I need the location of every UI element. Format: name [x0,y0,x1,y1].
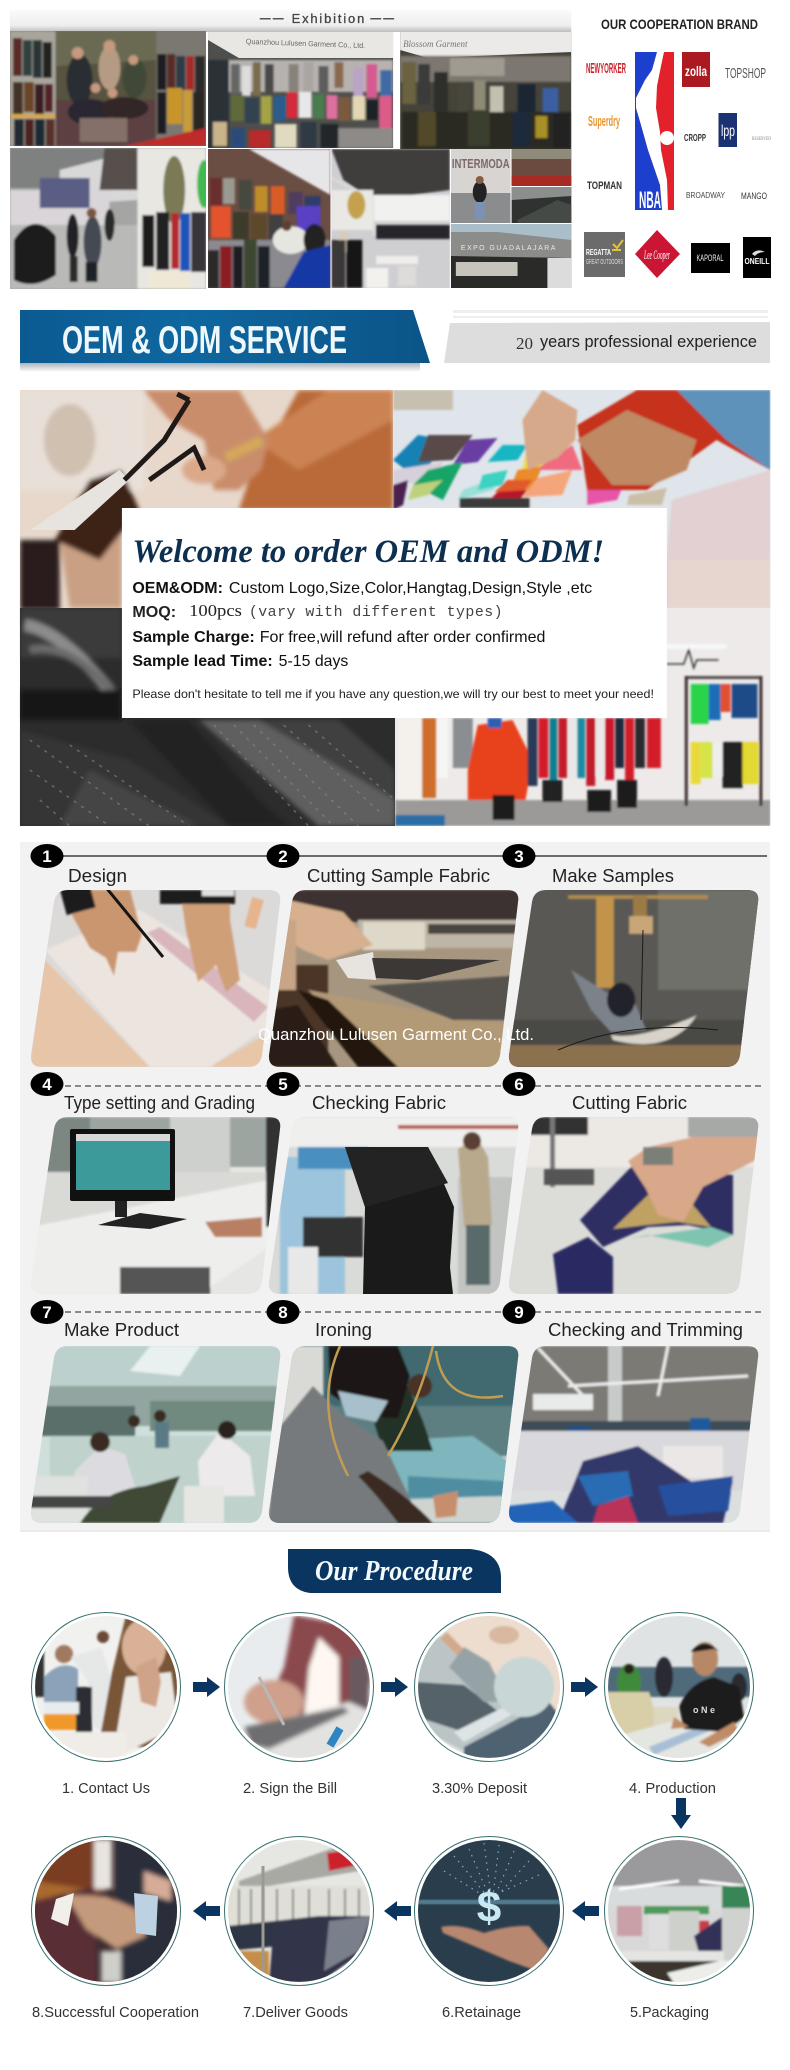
photo: ironing [268,1346,522,1523]
photo: checking fabric [268,1117,522,1294]
logo: NBA [635,52,674,214]
label: step 1 to 4: 2. Sign the Bill [243,1780,337,1797]
panel: cooperation brands: Superdry [588,113,620,130]
step 6 number [502,1072,536,1096]
info box: welcome to order [122,508,667,718]
banner: OEM & ODM service: OEM & ODM SERVICE [62,319,347,362]
line: sample charge [132,629,545,646]
photo: brick wall booth [208,149,330,288]
step 9 number [502,1300,536,1324]
panel: our procedure [32,1549,754,2021]
line: sample lead time: Sample lead Time: [132,653,273,670]
heading band: Exhibition [10,10,571,32]
arrow: down [671,1798,691,1829]
photo: Blossom booth: Blossom Garment [403,39,468,49]
photo: cutting sample fabric [268,890,522,1067]
panel: cooperation brands: NEWYORKER [586,60,626,77]
step 3 number [502,844,536,868]
logo: O'Neill [743,237,771,278]
photo: Expo Guadalajara [451,224,571,288]
photo: white booth with tables [331,149,450,288]
step 8 number: 8 [278,1303,288,1322]
logo: NBA: NBA [639,187,661,214]
arrow [571,1677,598,1697]
photo: colour swatches and hands [393,390,770,608]
photo: scissors cutting fabric [20,390,393,610]
step labels: Make Product [64,1319,179,1340]
step labels: Checking and Trimming [548,1319,743,1340]
logo: O'Neill: ONEILL [744,257,770,266]
line: MOQ: (vary with different types) [249,605,503,621]
photo: cutting fabric [508,1117,762,1294]
logo: Lee Cooper: Lee Cooper [644,247,670,262]
step 2: sign the bill [224,1612,374,1762]
label: step 8 to 5: 5.Packaging [630,2004,709,2021]
logo: Regatta: GREAT OUTDOORS [586,259,623,266]
panel: exhibition photos [10,10,571,289]
line: MOQ: 100pcs [189,601,242,620]
line: OEM&ODM: Custom Logo,Size,Color,Hangtag,Design,Style ,etc [229,580,592,597]
step 2 number: 2 [278,847,288,866]
step 7 number: 7 [42,1303,52,1322]
step labels: Type setting and Grading [64,1092,255,1113]
line: sample charge: Sample Charge: [132,629,255,646]
logo: Kaporal [691,243,730,273]
photo: exhibition hall [10,148,211,289]
logo: Cropp: CROPP [684,133,706,144]
step 4: production: oNe [693,1705,715,1715]
photo: booth with poster [10,31,206,146]
heading: our procedure: Our Procedure [315,1556,473,1587]
panel: cooperation brands [584,16,771,278]
step 5 number [266,1072,300,1096]
arrow [381,1677,408,1697]
label: step 1 to 4: 4. Production [629,1780,716,1797]
note: please contact: Please don't hesitate to tell me if you have any question,we will try our best to meet your need! [132,689,654,701]
label: step 8 to 5: 6.Retainage [442,2004,521,2021]
photo: clothing showroom [395,608,770,826]
step 8: successful cooperation [32,1836,180,1986]
step 1 number: 1 [42,847,52,866]
step 3 number: 3 [514,847,524,866]
logo: Broadway: BROADWAY [686,190,725,200]
watermark: Quanzhou Lulusen Garment Co., Ltd. [258,1025,534,1044]
step 7: deliver goods [224,1836,374,1986]
step 8 number [266,1300,300,1324]
logo: Reserved: RESERVED [752,136,771,142]
step labels: Make Samples [552,865,674,886]
label: step 8 to 5: 7.Deliver Goods [243,2004,348,2021]
photo: red carpet fair [512,149,571,186]
logo: Zolla [682,52,710,87]
photo: Intermoda visitor: INTERMODA [452,156,510,171]
step labels [64,865,743,1340]
step 5: packaging [604,1836,754,1986]
step labels: Ironing [315,1319,372,1340]
panel: OEM photo collage [20,390,770,826]
banner: years of experience: 20 [516,334,533,353]
label: step 8 to 5: 8.Successful Cooperation [32,2004,199,2021]
photo: dark hall [512,187,571,223]
logo: LPP: lpp [721,123,735,140]
heading band: Exhibition: Exhibition [292,11,364,26]
line: sample charge: For free,will refund after order confirmed [260,629,545,646]
photo: Intermoda visitor [451,149,511,223]
logo: Kaporal: KAPORAL [696,253,724,263]
logo: LPP [718,113,737,147]
step 6: retainage: $ [477,1883,501,1932]
logo: Zolla: zolla [685,63,707,79]
label: step 1 to 4: 3.30% Deposit [432,1780,528,1797]
step 3: deposit [414,1612,564,1762]
arrow: left [193,1901,220,1921]
banner: OEM & ODM service [20,310,430,372]
heading: our cooperation brand: OUR COOPERATION BRAND [601,16,758,32]
banner: years of experience [444,310,770,363]
photo: Lulusen booth: Quanzhou Lulusen Garment Co., Ltd. [246,37,365,50]
step labels: Cutting Sample Fabric [307,865,490,886]
step 7 number [30,1300,64,1324]
photo: checking and trimming [508,1346,762,1523]
arrow [193,1677,220,1697]
arrow: left [384,1901,411,1921]
photo: type setting and grading [30,1117,284,1294]
step 6 number: 6 [514,1075,524,1094]
photo: waterproof zipper fabric [20,608,395,826]
line: MOQ [132,601,503,621]
logo: Regatta [584,232,625,277]
step rules [60,856,767,1312]
arrow: left [572,1901,599,1921]
line: sample lead time [132,653,349,670]
banner: years of experience: years professional experience [540,332,757,351]
step 2 number [266,844,300,868]
photo: Lulusen booth [208,32,393,148]
photo: make samples [508,890,762,1067]
label: step 1 to 4 [62,1780,716,1797]
figure: woman in black [473,176,487,220]
logo: Regatta: REGATTA [586,247,611,257]
step labels: Design [68,865,127,886]
step 5 number: 5 [278,1075,288,1094]
step labels: Cutting Fabric [572,1092,687,1113]
label: step 1 to 4: 1. Contact Us [62,1780,150,1797]
photo: design [30,882,284,1067]
heading: our procedure [288,1549,501,1593]
photo: Blossom booth [400,32,571,149]
step 1 number [30,844,64,868]
step labels: Checking Fabric [312,1092,446,1113]
step 4: production [604,1612,754,1762]
line: sample lead time: 5-15 days [279,653,349,670]
step 4 number [30,1072,64,1096]
line: OEM&ODM: OEM&ODM: [132,580,223,597]
step 9 number: 9 [514,1303,524,1322]
logo: Mango: MANGO [741,191,767,201]
step 4 number: 4 [42,1075,52,1094]
logo: Lee Cooper [635,230,680,278]
line: MOQ: MOQ: [132,604,176,621]
title: welcome: Welcome to order OEM and ODM! [132,534,604,570]
label: step 8 to 5 [32,2004,709,2021]
photo: Expo Guadalajara: EXPO GUADALAJARA [461,245,556,252]
logo: Topman: TOPMAN [587,180,622,192]
photo: make product [30,1346,284,1523]
step 1: contact us [32,1612,180,1762]
step 6: retainage [414,1836,564,1986]
panel: production process [20,842,770,1532]
